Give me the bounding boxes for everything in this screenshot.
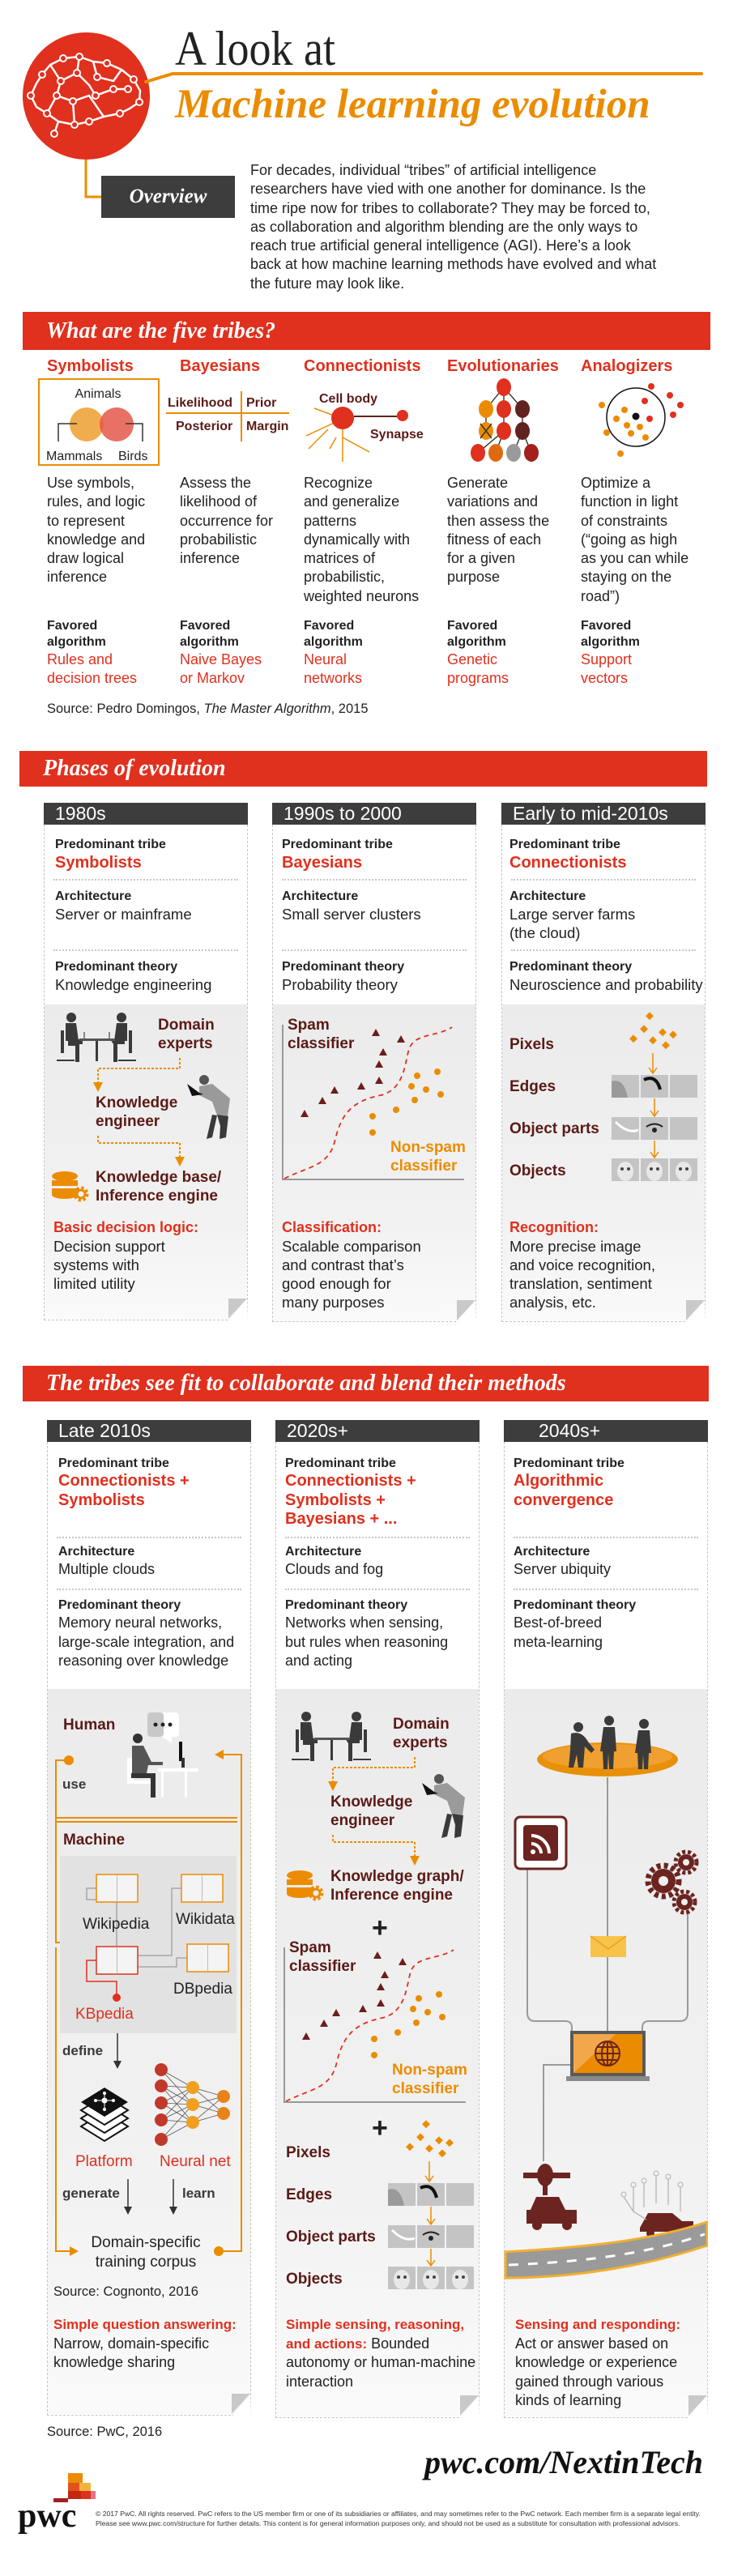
text: Evolutionaries description: purpose (447, 569, 500, 585)
field: predominant theory: Networks when sensing, (285, 1614, 443, 1631)
text: Analogizers algorithm: Support (581, 651, 632, 667)
field: predominant theory: Predominant theory (285, 1598, 407, 1612)
diagram: knowledge engineering flow: Knowledge (96, 1094, 177, 1111)
field: predominant tribe (285, 1456, 416, 1529)
banner: Phases of evolution: Phases of evolution (43, 756, 226, 781)
field: predominant tribe: Symbolists (55, 854, 142, 872)
text: Symbolists description: rules, and logic (47, 493, 145, 510)
field: predominant theory: and acting (285, 1653, 352, 1669)
field: architecture: Architecture (514, 1545, 590, 1559)
text: classification: many purposes (282, 1294, 384, 1311)
text: Analogizers description: Optimize a (581, 475, 650, 491)
text: sensing and responding: kinds of learning (515, 2392, 621, 2408)
text: Symbolists algorithm: Rules and (47, 651, 113, 667)
text: Bayesians description: Assess the (180, 475, 251, 491)
text: overview paragraph: time ripe now for tribes to collaborate? They may be forced to, (250, 200, 650, 216)
text: sensing and responding (515, 2315, 680, 2411)
field: predominant theory (55, 960, 211, 993)
text: Symbolists algorithm: decision trees (47, 670, 137, 686)
text: Analogizers algorithm: algorithm (581, 635, 640, 649)
field: predominant tribe: Predominant tribe (55, 838, 166, 851)
text: Evolutionaries algorithm: algorithm (447, 635, 506, 649)
field: predominant tribe: Symbolists (58, 1491, 145, 1508)
text: Evolutionaries description: then assess the (447, 513, 549, 529)
text: classification (282, 1219, 421, 1311)
tribe name: Bayesians: Bayesians (180, 357, 260, 375)
text: Bayesians algorithm: algorithm (180, 635, 239, 649)
panel: Bayesians (166, 357, 289, 686)
text: overview paragraph: the future may look like. (250, 275, 404, 292)
panel: Evolutionaries (447, 357, 559, 686)
field: predominant theory (282, 960, 404, 993)
text: Bayesians algorithm: Naive Bayes (180, 651, 262, 667)
field: predominant theory: Predominant theory (282, 960, 404, 974)
text: Evolutionaries algorithm: Genetic (447, 651, 497, 667)
diagram: human-machine knowledge loop: Platform (75, 2153, 133, 2170)
field: predominant theory: Predominant theory (509, 960, 632, 974)
diagram: pixels to objects (509, 1013, 697, 1181)
text: Connectionists description: probabilistic, (304, 569, 385, 585)
text: Bayesians algorithm (180, 619, 262, 686)
field: architecture: (the cloud) (509, 924, 580, 941)
footer: copyright (96, 2509, 701, 2528)
tribe name: Symbolists: Symbolists (47, 357, 134, 375)
field: predominant tribe (282, 838, 393, 872)
text: Connectionists description: patterns (304, 513, 356, 529)
text: Connectionists algorithm: Favored (304, 619, 354, 633)
field: architecture (285, 1544, 383, 1580)
icon: neuron: Synapse (370, 428, 424, 441)
icon: support vector circle (599, 383, 684, 457)
chart: spam classifier scatter: Spam (288, 1017, 330, 1034)
panel: 2040s+ (504, 1420, 708, 2418)
footer: pwc.com/NextinTech: pwc.com/NextinTech (424, 2444, 703, 2480)
diagram: server ubiquity network (504, 1709, 708, 2284)
tribe name: Evolutionaries: Evolutionaries (447, 357, 559, 375)
diagram: pixels to objects: Pixels (509, 1036, 554, 1053)
text: Connectionists algorithm: networks (304, 670, 362, 686)
text: Symbolists description: draw logical (47, 550, 124, 566)
text: Symbolists algorithm: Favored (47, 619, 97, 633)
text: Analogizers description (581, 475, 688, 604)
text: Evolutionaries description: Generate (447, 475, 508, 491)
diagram: knowledge engineering flow: Inference engine (96, 1188, 218, 1205)
header: 1980s: 1980s (55, 803, 106, 824)
header: 1990s to 2000 (272, 803, 476, 825)
panel: Analogizers (581, 357, 688, 686)
diagram: human-machine knowledge loop: Human (63, 1717, 115, 1734)
logo: pwc (18, 2471, 99, 2532)
text: Symbolists algorithm: algorithm (47, 635, 106, 649)
text: simple sensing: interaction (286, 2373, 353, 2390)
field: predominant tribe: Algorithmic (514, 1472, 603, 1490)
text: overview paragraph: For decades, individual “tribes” of artificial intelligence (250, 162, 596, 178)
field: predominant tribe: Bayesians (282, 854, 362, 872)
text: Connectionists algorithm: Neural (304, 651, 347, 667)
footer: copyright: Please see www.pwc.com/structure for further details. This content is for general information purposes only, and should not be used as a substitute for consultation with professional advisors. (96, 2519, 680, 2527)
text: Analogizers description: road”) (581, 588, 620, 604)
text: classification: and contrast that’s (282, 1256, 404, 1273)
field: predominant theory (58, 1597, 234, 1670)
header: 1990s to 2000: 1990s to 2000 (284, 803, 402, 824)
field: predominant tribe: Bayesians + ... (285, 1510, 397, 1528)
header: 2020s+ (275, 1420, 480, 1442)
field: predominant tribe: Symbolists + (285, 1491, 386, 1508)
field: predominant tribe: Predominant tribe (509, 838, 620, 851)
field: architecture (58, 1544, 155, 1580)
text: simple question answering (53, 2315, 237, 2372)
field: predominant theory: Predominant theory (55, 960, 177, 974)
text: Evolutionaries description: for a given (447, 550, 515, 566)
icon: venn diagram (38, 378, 160, 466)
tribe name: Connectionists: Connectionists (304, 357, 420, 375)
field: predominant theory: but rules when reasoning (285, 1633, 448, 1649)
text: sensing and responding: Act or answer based on (515, 2335, 668, 2351)
chart: spam classifier scatter: classifier (288, 1035, 355, 1052)
chart: spam classifier scatter: classifier (289, 1958, 356, 1975)
text: basic decision logic: systems with (53, 1256, 139, 1273)
banner: What are the five tribes?: What are the five tribes? (46, 318, 275, 343)
text: recognition: translation, sentiment (509, 1275, 652, 1292)
panel: 1990s to 2000 (272, 803, 476, 1322)
panel: Symbolists (38, 357, 160, 686)
chart: spam classifier scatter: classifier (390, 1158, 458, 1175)
text: Bayesians description (180, 475, 273, 566)
diagram: knowledge engineering flow: Knowledge base/ (96, 1169, 222, 1186)
text: recognition: Recognition: (509, 1219, 599, 1235)
text: overview paragraph: reach true artificial general intelligence (AGI). Here’s a look (250, 237, 631, 254)
field: architecture: Architecture (285, 1545, 361, 1559)
diagram: knowledge engineering flow: Domain (158, 1017, 215, 1034)
text: Evolutionaries description: variations and (447, 493, 538, 510)
field: predominant theory (514, 1597, 636, 1652)
text: Connectionists algorithm (304, 619, 363, 686)
field: predominant tribe (55, 838, 166, 872)
diagram: knowledge graph flow: engineer (330, 1812, 395, 1829)
icon: venn diagram: Animals (75, 387, 121, 401)
text: Symbolists algorithm (47, 619, 137, 686)
text: classification: Classification: (282, 1219, 382, 1235)
text: basic decision logic (53, 1219, 198, 1292)
text: Connectionists algorithm: algorithm (304, 635, 363, 649)
field: architecture (509, 889, 635, 941)
diagram: knowledge graph flow: Knowledge graph/ (330, 1868, 464, 1885)
text: basic decision logic: Decision support (53, 1238, 165, 1255)
diagram: pixels to objects: Object parts (509, 1120, 599, 1137)
text: Symbolists description: to represent (47, 513, 125, 529)
field: predominant tribe (509, 838, 626, 872)
icon: bayes grid: Prior (246, 396, 276, 410)
diagram: human-machine knowledge loop: generate (62, 2186, 120, 2201)
text: Analogizers description: as you can while (581, 550, 688, 566)
text: simple sensing (286, 2315, 475, 2391)
field: predominant theory: Best-of-breed (514, 1614, 602, 1631)
logo: pwc: pwc (18, 2497, 76, 2535)
icon: plus: + (372, 2113, 388, 2143)
field: architecture: Clouds and fog (285, 1561, 383, 1577)
header: 2020s+: 2020s+ (287, 1420, 348, 1441)
field: architecture: Server or mainframe (55, 906, 192, 923)
text: simple sensing: autonomy or human-machine (286, 2354, 475, 2370)
chart: spam classifier scatter (275, 1931, 480, 2109)
text: Symbolists description (47, 475, 145, 585)
banner: Phases of evolution (19, 751, 707, 787)
diagram: human-machine knowledge loop: Domain-specific (91, 2234, 201, 2251)
source: Domingos: Source: Pedro Domingos, The Master Algorithm, 2015 (47, 702, 368, 716)
source: PwC: Source: PwC, 2016 (47, 2425, 162, 2439)
diagram: human-machine knowledge loop: KBpedia (75, 2006, 134, 2023)
icon: bayes grid (166, 391, 289, 441)
field: architecture: Multiple clouds (58, 1561, 155, 1577)
field: architecture: Architecture (509, 889, 586, 903)
header: 2040s+: 2040s+ (539, 1420, 600, 1441)
text: recognition: More precise image (509, 1238, 641, 1255)
diagram: knowledge engineering flow: experts (158, 1035, 213, 1052)
diagram: knowledge graph flow: Knowledge (330, 1793, 412, 1810)
header: Early to mid-2010s: Early to mid-2010s (513, 803, 668, 824)
text: Symbolists description: Use symbols, (47, 475, 134, 491)
field: architecture: Large server farms (509, 906, 635, 923)
diagram: knowledge engineering flow: engineer (96, 1113, 160, 1130)
text: recognition: and voice recognition, (509, 1256, 655, 1273)
diagram: human-machine knowledge loop: Neural net (160, 2153, 231, 2170)
text: simple sensing: Simple sensing, reasoning, (286, 2317, 464, 2332)
text: Connectionists description (304, 475, 419, 604)
icon: bayes grid: Posterior (176, 420, 232, 433)
text: Analogizers description: function in light (581, 493, 678, 510)
field: architecture (514, 1544, 611, 1580)
diagram: human-machine knowledge loop: training corpus (96, 2254, 196, 2271)
text: Symbolists description: inference (47, 569, 107, 585)
text: Connectionists description: Recognize (304, 475, 373, 491)
field: architecture: Server ubiquity (514, 1561, 611, 1577)
chart: spam classifier scatter: Spam (289, 1939, 331, 1956)
text: Analogizers algorithm: vectors (581, 670, 628, 686)
icon: evolution tree (471, 378, 539, 462)
title: A look at: A look at (175, 22, 335, 75)
diagram: pixels to objects: Edges (509, 1078, 556, 1095)
header: Late 2010s (47, 1420, 251, 1442)
text: Bayesians algorithm: or Markov (180, 670, 245, 686)
field: architecture: Architecture (282, 889, 358, 903)
diagram: pixels to objects: Objects (509, 1162, 566, 1179)
field: predominant tribe: Connectionists + (58, 1472, 190, 1490)
diagram: pixels to objects: Edges (286, 2186, 332, 2203)
field: predominant theory: Predominant theory (514, 1598, 636, 1612)
diagram: knowledge engineering flow (52, 1013, 230, 1205)
diagram: pixels to objects: Object parts (286, 2228, 376, 2245)
field: architecture: Architecture (55, 889, 131, 903)
text: sensing and responding: knowledge or experience (515, 2354, 677, 2370)
diagram: human-machine knowledge loop: Machine (63, 1832, 125, 1849)
diagram: human-machine knowledge loop: Wikidata (176, 1911, 235, 1928)
label: Overview (101, 176, 235, 218)
chart: spam classifier scatter: Non-spam (390, 1139, 466, 1156)
text: basic decision logic: limited utility (53, 1275, 135, 1292)
text: simple sensing: and actions: Bounded (286, 2335, 429, 2351)
icon: bayes grid: Likelihood (168, 396, 232, 410)
diagram: human-machine knowledge loop: Wikipedia (83, 1916, 150, 1933)
banner: The tribes see fit to collaborate (23, 1366, 709, 1401)
chart: spam classifier scatter: classifier (392, 2080, 459, 2097)
field: predominant tribe: Connectionists + (285, 1472, 416, 1490)
text: Bayesians algorithm: Favored (180, 619, 230, 633)
text: sensing and responding: Sensing and responding: (515, 2317, 680, 2332)
text: overview paragraph: researchers have vied with one another for dominance. Is the (250, 181, 646, 197)
diagram: pixels to objects: Objects (286, 2271, 343, 2288)
panel: 2020s+ (275, 1420, 480, 2418)
diagram: knowledge graph flow (275, 1701, 480, 1908)
text: overview paragraph: back at how machine learning methods have evolved and what (250, 256, 656, 272)
icon: bayes grid: Margin (246, 420, 288, 433)
panel: Early to mid-2010s (501, 803, 706, 1322)
text: Bayesians description: likelihood of (180, 493, 257, 510)
field: predominant theory: Neuroscience and probability (509, 976, 703, 993)
text: sensing and responding: gained through various (515, 2373, 663, 2390)
text: overview paragraph: as collaboration and algorithm blending are the only ways to (250, 219, 637, 235)
icon: venn diagram: Mammals (46, 450, 102, 463)
text: simple question answering: knowledge sharing (53, 2354, 175, 2370)
text: Connectionists description: matrices of (304, 550, 375, 566)
diagram: human-machine knowledge loop (47, 1701, 251, 2276)
diagram: pixels to objects (275, 2117, 480, 2295)
field: predominant tribe: Connectionists (509, 854, 626, 872)
field: predominant tribe: Predominant tribe (285, 1456, 396, 1470)
panel: 1980s (44, 803, 248, 1320)
text: Evolutionaries description: fitness of each (447, 531, 541, 548)
text: classification: good enough for (282, 1275, 391, 1292)
text: Connectionists description: and generalize (304, 493, 399, 510)
tribe name: Analogizers: Analogizers (581, 357, 672, 375)
diagram: knowledge graph flow: Inference engine (330, 1887, 453, 1904)
text: Evolutionaries description (447, 475, 549, 585)
text: Evolutionaries algorithm (447, 619, 509, 686)
text: Bayesians description: inference (180, 550, 240, 566)
text: Analogizers description: (“going as high (581, 531, 677, 548)
field: predominant theory (285, 1597, 448, 1670)
diagram: human-machine knowledge loop: define (62, 2043, 103, 2058)
header: Late 2010s: Late 2010s (58, 1420, 151, 1441)
text: classification: Scalable comparison (282, 1238, 421, 1255)
text: Connectionists description: dynamically with (304, 531, 410, 548)
diagram: human-machine knowledge loop: DBpedia (173, 1981, 232, 1998)
field: architecture (282, 889, 421, 923)
diagram: knowledge graph flow: Domain (393, 1716, 450, 1733)
label: Overview: Overview (130, 186, 207, 207)
field: predominant tribe (58, 1456, 190, 1510)
text: recognition: analysis, etc. (509, 1294, 596, 1311)
panel: Connectionists (304, 357, 424, 686)
field: predominant tribe: Predominant tribe (282, 838, 393, 851)
chart: spam classifier scatter (282, 1017, 466, 1180)
field: architecture: Small server clusters (282, 906, 421, 923)
title: Machine learning evolution: Machine learning evolution (175, 82, 650, 127)
text: overview paragraph (250, 162, 656, 292)
field: predominant tribe: Predominant tribe (58, 1456, 169, 1470)
field: predominant theory: Predominant theory (58, 1598, 181, 1612)
text: Evolutionaries algorithm: Favored (447, 619, 497, 633)
banner: The tribes see fit to collaborate: The tribes see fit to collaborate and blend their methods (46, 1371, 566, 1396)
field: predominant theory: reasoning over knowledge (58, 1653, 228, 1669)
text: Bayesians description: probabilistic (180, 531, 257, 548)
field: predominant theory: large-scale integration, and (58, 1633, 234, 1649)
panel: Late 2010s (47, 1420, 251, 2416)
diagram: human-machine knowledge loop: learn (182, 2186, 215, 2201)
text: Connectionists description: weighted neurons (304, 588, 419, 604)
text: Evolutionaries algorithm: programs (447, 670, 509, 686)
field: predominant theory: Probability theory (282, 976, 398, 993)
icon: neuron (306, 392, 424, 462)
diagram: pixels to objects: Pixels (286, 2144, 330, 2161)
field: architecture: Architecture (58, 1545, 134, 1559)
field: predominant theory (509, 960, 703, 993)
text: Analogizers algorithm: Favored (581, 619, 631, 633)
diagram: knowledge graph flow: experts (393, 1734, 448, 1751)
icon: brain circle (23, 32, 150, 160)
icon: plus: + (372, 1913, 388, 1943)
field: predominant tribe (514, 1456, 625, 1510)
field: predominant tribe: convergence (514, 1491, 613, 1508)
chart: spam classifier scatter: Non-spam (392, 2062, 467, 2079)
field: predominant theory: Memory neural networks, (58, 1614, 222, 1631)
field: architecture (55, 889, 192, 923)
text: Symbolists description: knowledge and (47, 531, 145, 548)
header: 1980s (44, 803, 248, 825)
text: Analogizers description: staying on the (581, 569, 671, 585)
field: predominant tribe: Predominant tribe (514, 1456, 625, 1470)
header: 2040s+ (504, 1420, 708, 1442)
text: simple question answering: Simple question answering: (53, 2317, 237, 2332)
banner: What are the five tribes? (23, 312, 710, 350)
text: simple question answering: Narrow, domain-specific (53, 2335, 209, 2351)
text: Analogizers description: of constraints (581, 513, 667, 529)
field: predominant theory: Knowledge engineering (55, 976, 211, 993)
source: Cognonto: Source: Cognonto, 2016 (53, 2284, 198, 2299)
icon: neuron: Cell body (319, 392, 377, 406)
diagram: human-machine knowledge loop: use (62, 1776, 86, 1792)
text: Analogizers algorithm (581, 619, 640, 686)
text: recognition (509, 1218, 655, 1311)
footer: copyright: © 2017 PwC. All rights reserved. PwC refers to the US member firm or one of its subsidiaries or affiliates, and may sometimes refer to the PwC network. Each member firm is a separate legal entity. (96, 2510, 701, 2518)
text: Bayesians description: occurrence for (180, 513, 273, 529)
text: basic decision logic: Basic decision logic: (53, 1219, 198, 1235)
icon: venn diagram: Birds (118, 450, 147, 463)
field: predominant theory: meta-learning (514, 1633, 603, 1649)
